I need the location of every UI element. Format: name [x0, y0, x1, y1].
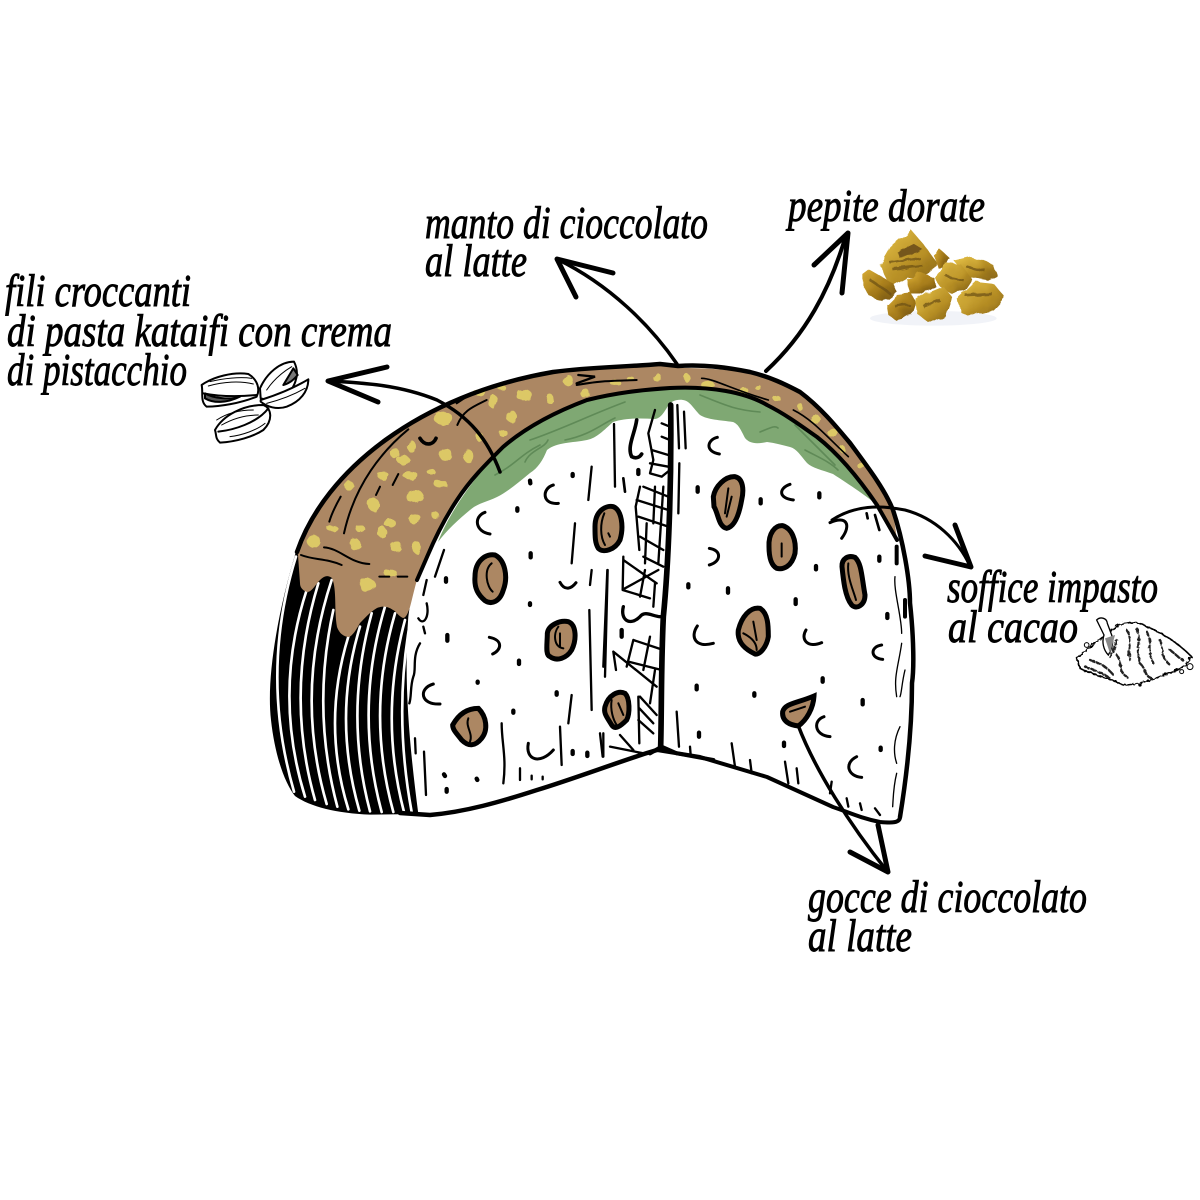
label: manto di cioccolato: [425, 198, 708, 286]
chocolate chips inner marks: [468, 513, 623, 742]
label: pepite dorate: pepite dorate: [786, 181, 985, 231]
centre cut and lattice crumb: [600, 405, 905, 815]
gold flecks on the coating: [307, 373, 865, 592]
icon: pistachios: [202, 362, 308, 443]
label: gocce di cioccolato: gocce di cioccolato: [808, 872, 1087, 922]
illustration: panettone cut-away: [270, 364, 913, 822]
arrow: to dough label: [832, 507, 971, 567]
icon: cocoa powder pile: [1077, 618, 1193, 687]
chips inner marks, right: [725, 488, 856, 712]
icon: gold nuggets: [863, 229, 1005, 326]
striped crust side: [270, 547, 418, 815]
crumb holes, left face: [409, 467, 607, 795]
arrow: to gold nuggets label: [766, 233, 848, 371]
crumb holes, right face: [622, 437, 887, 777]
main outline: [297, 364, 913, 822]
chocolate chips, left face: [453, 506, 629, 745]
label: manto di cioccolato: manto di cioccolato: [425, 198, 708, 248]
label: soffice impasto: al cacao: [948, 602, 1078, 652]
label: gocce di cioccolato: al latte: [808, 911, 912, 961]
brown milk-chocolate coating: [297, 366, 897, 637]
arrow: to coating label: [557, 259, 677, 364]
arrow: to pistachio label: [328, 367, 500, 472]
label: fili croccanti: di pistacchio: [7, 345, 187, 395]
label: fili croccanti: [5, 266, 392, 395]
arrow: to chocolate drops label: [798, 725, 888, 872]
label: manto di cioccolato: al latte: [425, 236, 527, 286]
label: gocce di cioccolato: [808, 872, 1087, 961]
green pistachio cream layer: [438, 386, 877, 542]
chocolate chips, right face: [713, 477, 865, 726]
green cream shading: [495, 395, 838, 475]
coating crack lines: [301, 375, 637, 577]
label: soffice impasto: [947, 562, 1158, 652]
label: fili croccanti: fili croccanti: [5, 266, 191, 316]
right coating lines: [702, 378, 848, 457]
label: fili croccanti: di pasta kataifi con crema: [7, 306, 392, 356]
